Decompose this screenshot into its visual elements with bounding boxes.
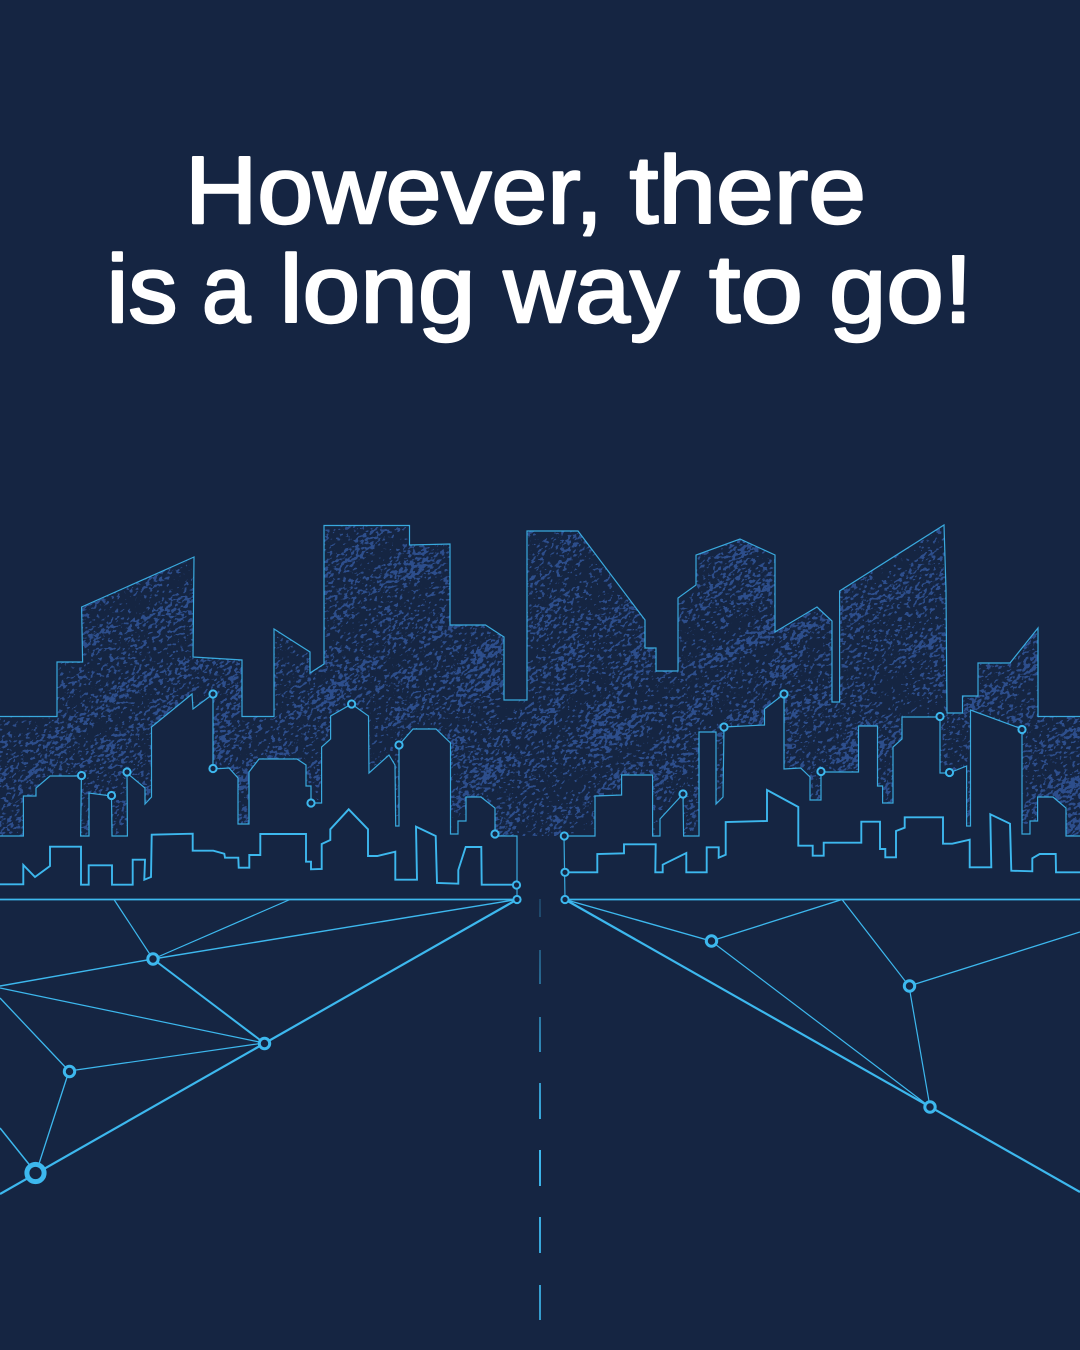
skyline lower outline left: [0, 809, 516, 885]
title: is: [106, 236, 178, 343]
title: However,: [185, 137, 603, 244]
skyline lower outline right: [565, 790, 1080, 872]
horizon line: [0, 898, 1080, 900]
title: to: [709, 236, 803, 343]
title: [106, 137, 972, 343]
textured city silhouette: [0, 526, 1080, 836]
small skyline nodes: [78, 690, 1026, 903]
title: a: [202, 236, 251, 343]
title: way: [502, 236, 680, 343]
large network node: [27, 1164, 44, 1182]
title: there: [630, 137, 866, 244]
centre road dashes: [539, 899, 541, 1320]
title: go!: [829, 236, 972, 343]
network nodes: [64, 936, 935, 1112]
network lines left: [0, 900, 517, 1194]
skyline upper outline: [0, 525, 1080, 899]
title: long: [280, 236, 476, 343]
network lines right: [565, 900, 1080, 1192]
